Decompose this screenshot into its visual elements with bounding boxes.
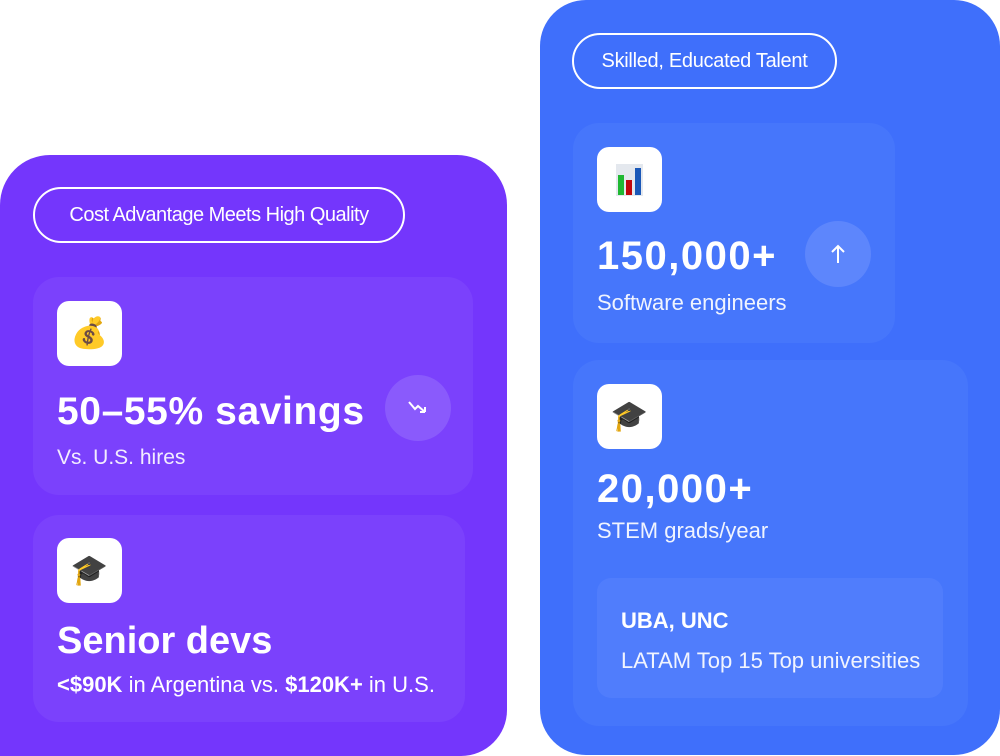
icon: graduation cap: [57, 538, 122, 603]
icon: graduation cap: 🎓: [71, 553, 108, 588]
panel: cost advantage: [0, 155, 507, 756]
pill heading: skilled talent: [572, 33, 837, 89]
text: UBA UNC: UBA, UNC: [621, 608, 729, 633]
icon: trend down: [385, 375, 451, 441]
sub box: universities: [597, 578, 943, 698]
text: vs US hires: Vs. U.S. hires: [57, 446, 185, 469]
icon: arrow up: [805, 221, 871, 287]
text: software engineers: Software engineers: [597, 290, 787, 315]
stat box: savings: [33, 277, 473, 495]
text: LATAM top: LATAM Top 15 Top universities: [621, 648, 920, 673]
stat box: stem grads: [573, 360, 968, 726]
text: salary comparison: <$90K in Argentina vs. $120K+ in U.S.: [57, 672, 435, 697]
stat: senior devs: Senior devs: [57, 620, 272, 662]
icon: graduation cap: [597, 384, 662, 449]
panel: skilled talent: [540, 0, 1000, 755]
icon: bar chart: [597, 147, 662, 212]
icon: money bag: [57, 301, 122, 366]
stat box: senior devs: [33, 515, 465, 722]
stat: 20,000+: 20,000+: [597, 467, 753, 511]
icon: money bag: 💰: [71, 316, 108, 351]
pill heading: skilled talent: Skilled, Educated Talent: [602, 50, 807, 72]
stat box: engineers: [573, 123, 895, 343]
icon: graduation cap: 🎓: [611, 399, 648, 434]
pill heading: cost advantage: Cost Advantage Meets High Quality: [69, 204, 369, 226]
stat: 50-55% savings: 50–55% savings: [57, 390, 365, 433]
text: stem grads: STEM grads/year: [597, 518, 768, 543]
pill heading: cost advantage: [33, 187, 405, 243]
stat: 150,000+: 150,000+: [597, 234, 777, 278]
